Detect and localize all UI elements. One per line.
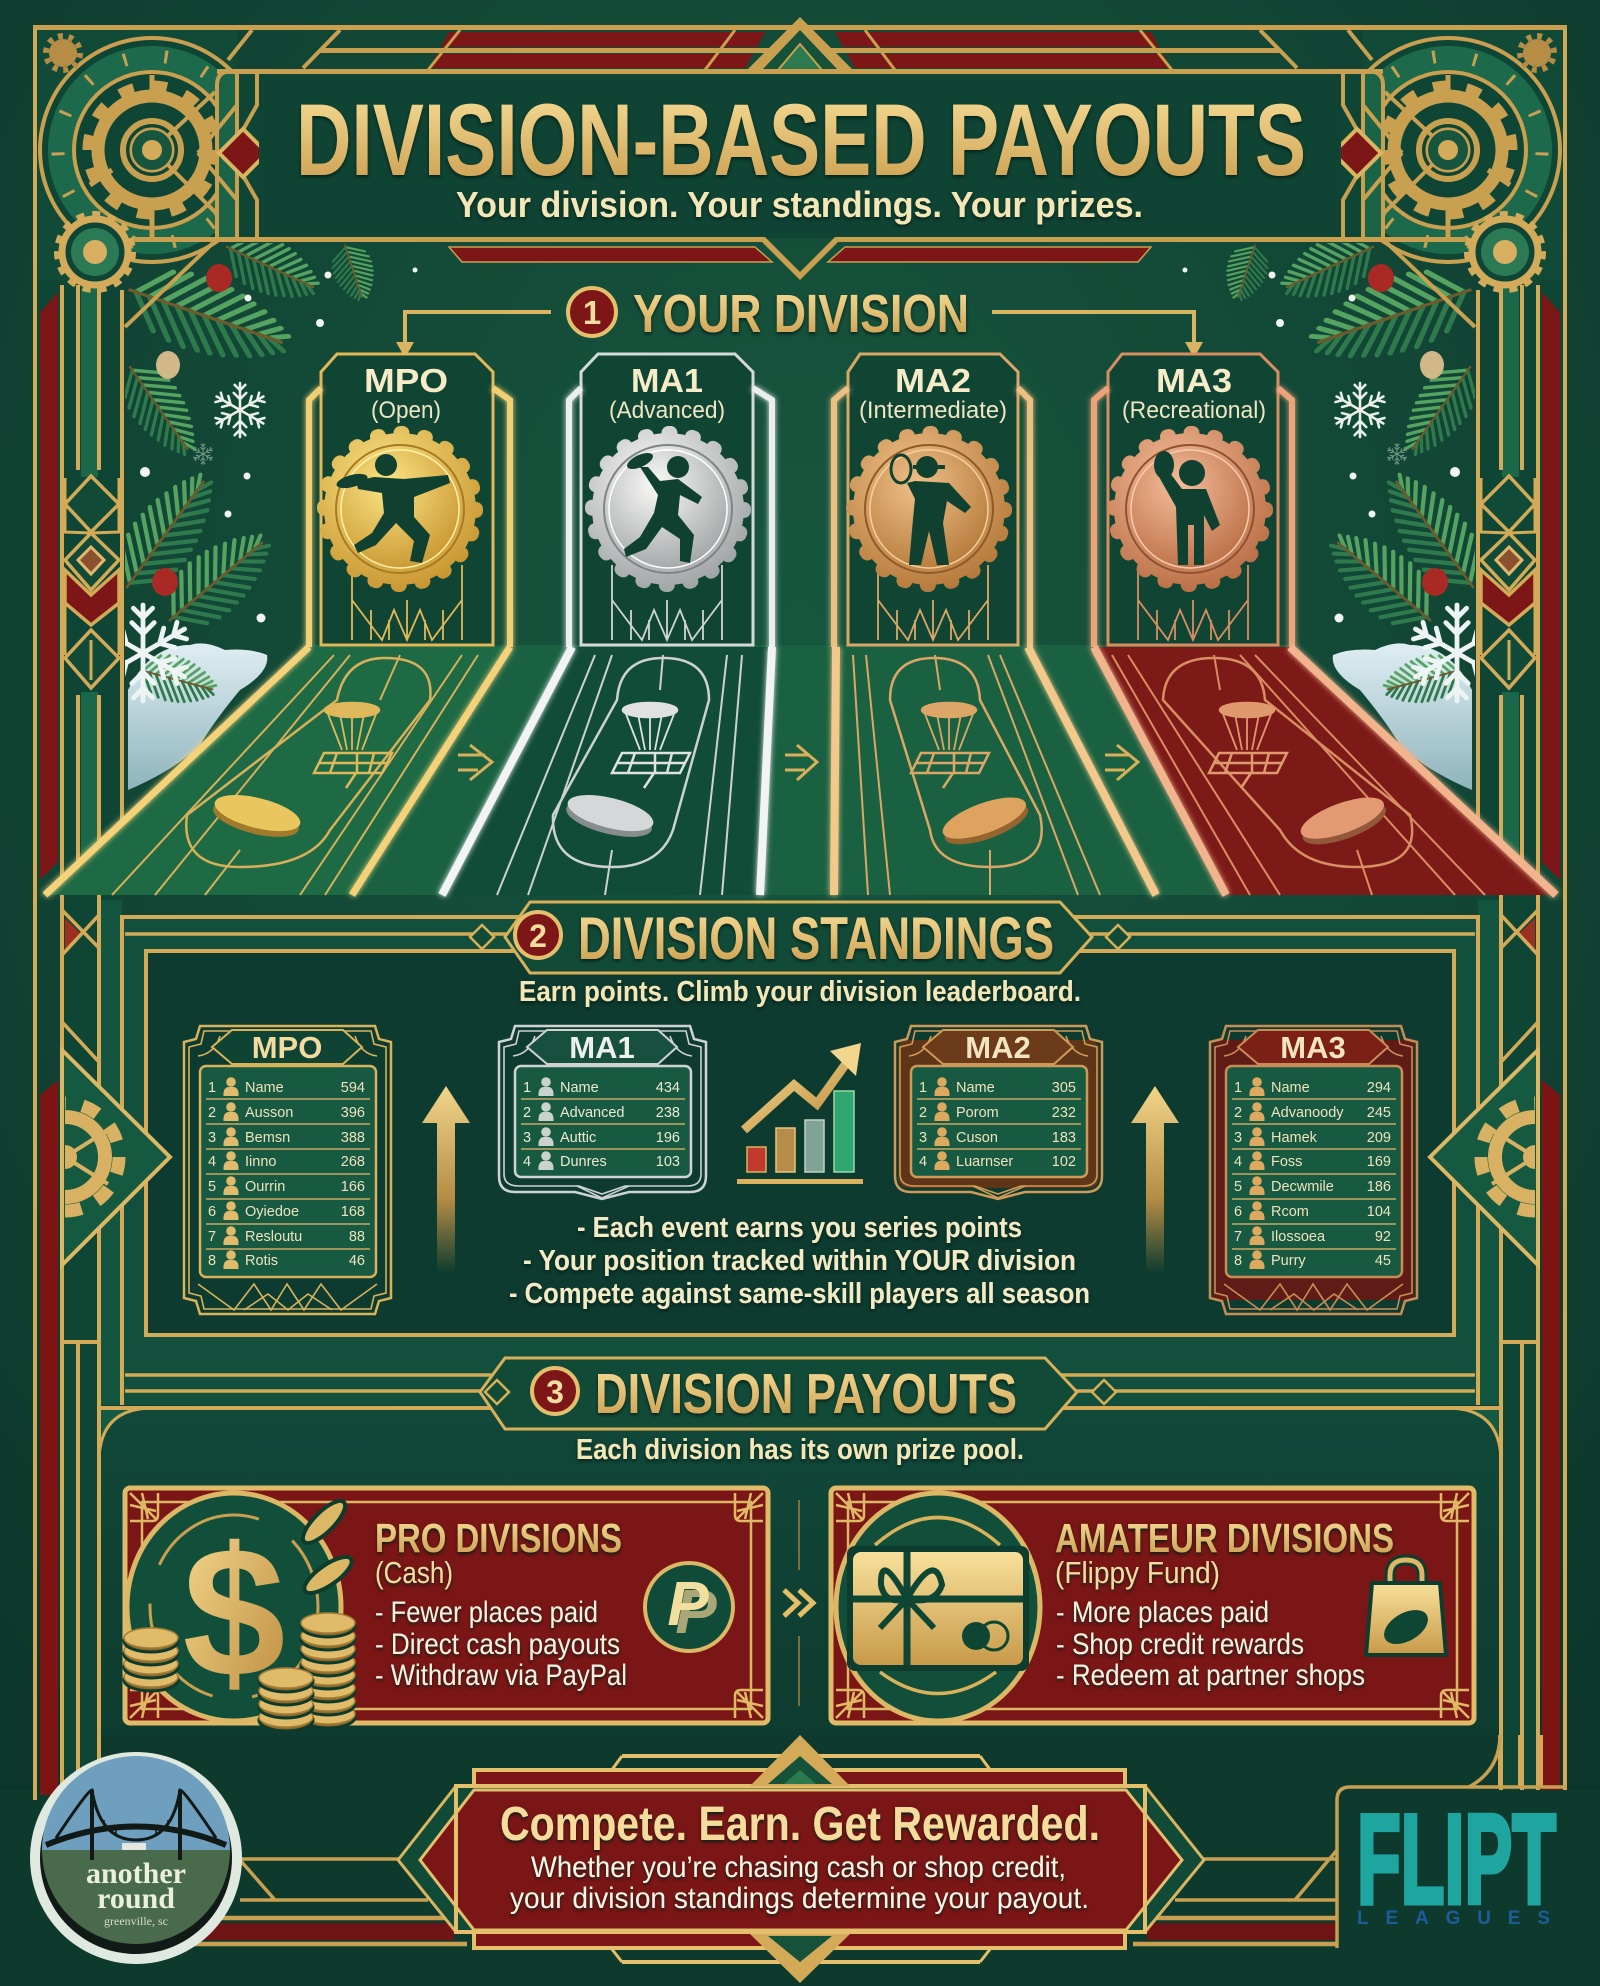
table: MPO leaderboard: 268: [341, 1154, 365, 1170]
table: MA3 leaderboard: 4: [1234, 1154, 1242, 1170]
lane: MPO: [45, 647, 510, 895]
table: MPO leaderboard: [184, 1026, 391, 1314]
table: MA1 leaderboard: 2: [523, 1105, 531, 1121]
badge 1: 1: [583, 294, 601, 331]
bullets: [375, 1596, 627, 1692]
decoration: pine branches and snow: [96, 223, 1504, 790]
heading banner: 3: [546, 1374, 564, 1410]
table: MPO leaderboard: 46: [349, 1253, 365, 1269]
icon: disc: [563, 788, 657, 844]
lane: MA1: [442, 647, 772, 895]
table: MA3 leaderboard: 3: [1234, 1130, 1242, 1146]
bullets: [1056, 1596, 1365, 1692]
icon: right gear chevron: [1430, 1050, 1589, 1265]
bullets: - Shop credit rewards: [1056, 1628, 1304, 1661]
table: MA3 leaderboard: 45: [1375, 1253, 1391, 1269]
division card: MA3: [1094, 354, 1292, 647]
table: MPO leaderboard: Ourrin: [245, 1179, 285, 1195]
heading banner: 2: [529, 918, 547, 954]
card: pro divisions: [124, 1488, 768, 1731]
table: MA3 leaderboard: 245: [1367, 1105, 1391, 1121]
icon: left gear chevron: [11, 1050, 170, 1265]
heading: section 1 your division: [396, 284, 1203, 358]
division card: MPO: [309, 354, 510, 647]
table: MA3 leaderboard: 169: [1367, 1154, 1391, 1170]
icon: dollar medallion: $: [183, 1510, 285, 1716]
bullets: - Direct cash payouts: [375, 1628, 620, 1661]
table: MA3 leaderboard: 8: [1234, 1253, 1242, 1269]
heading banner: DIVISION STANDINGS: [578, 905, 1054, 972]
table: MA2 leaderboard: Cuson: [956, 1130, 998, 1146]
logo: another round: greenville, sc: [104, 1914, 168, 1928]
logo: another round: [30, 1752, 242, 1964]
table: MPO leaderboard: 8: [208, 1253, 216, 1269]
division label: MPO: [364, 362, 448, 399]
subtitle: Each division has its own prize pool.: [576, 1434, 1024, 1466]
table: MA2 leaderboard: 1: [919, 1080, 927, 1096]
logo: FLIPT leagues: LEAGUES: [1357, 1908, 1550, 1929]
table: MA1 leaderboard: Advanced: [560, 1105, 624, 1121]
table: MA3 leaderboard: 5: [1234, 1179, 1242, 1195]
table: MPO leaderboard: 7: [208, 1229, 216, 1245]
icon: basket: [314, 703, 392, 788]
table: MPO leaderboard: Ausson: [245, 1105, 293, 1121]
table: MPO leaderboard: 166: [341, 1179, 365, 1195]
logo: another round: another: [86, 1857, 186, 1890]
bullets: - Redeem at partner shops: [1056, 1659, 1365, 1692]
table: MPO leaderboard: 3: [208, 1130, 216, 1146]
division card: MA1: [569, 354, 772, 647]
chart: rising bars and arrow: [737, 1043, 863, 1184]
icon: shopping bag: [1366, 1560, 1446, 1655]
frame: top art deco band: [33, 17, 1567, 72]
table: MPO leaderboard: Bemsn: [245, 1130, 290, 1146]
table: MA2 leaderboard: 3: [919, 1130, 927, 1146]
table: MPO leaderboard: 594: [341, 1080, 365, 1096]
table: MPO leaderboard: 88: [349, 1229, 365, 1245]
table: MA3 leaderboard: Advanoody: [1271, 1105, 1344, 1121]
heading: PRO DIVISIONS: [375, 1515, 622, 1561]
panel: section 2 standings: [122, 902, 1478, 1405]
table: MA2 leaderboard: 102: [1052, 1154, 1076, 1170]
icon: PayPal: P: [667, 1570, 709, 1639]
table: MA3 leaderboard: [1210, 1026, 1417, 1314]
table: MA3 leaderboard: Decwmile: [1271, 1179, 1334, 1195]
text block: standings bullets: - Your position tracked within YOUR division: [523, 1245, 1076, 1277]
table: MA1 leaderboard: 238: [656, 1105, 680, 1121]
division label: MA3: [1156, 362, 1232, 399]
table: MPO leaderboard: 396: [341, 1105, 365, 1121]
table: MPO leaderboard: MPO: [252, 1030, 322, 1065]
division card: MA1: (Advanced): [609, 397, 725, 424]
icon: disc: [1296, 789, 1391, 853]
table: MA1 leaderboard: 434: [656, 1080, 680, 1096]
message: Whether you’re chasing cash or shop credit,: [531, 1851, 1066, 1884]
text block: standings bullets: - Each event earns you series points: [577, 1212, 1022, 1244]
table: MA3 leaderboard: 186: [1367, 1179, 1391, 1195]
icon: disc: [938, 789, 1033, 853]
icon: basket: [911, 703, 989, 788]
table: MA2 leaderboard: 4: [919, 1154, 927, 1170]
table: MA2 leaderboard: Name: [956, 1080, 995, 1096]
card: amateur divisions: (Flippy Fund): [1055, 1555, 1220, 1590]
table: MA1 leaderboard: 1: [523, 1080, 531, 1096]
table: MA3 leaderboard: Hamek: [1271, 1130, 1318, 1146]
subtitle: Your division. Your standings. Your prizes.: [456, 184, 1143, 225]
bullets: - More places paid: [1056, 1596, 1269, 1629]
heading: section 1 your division: YOUR DIVISION: [633, 284, 969, 344]
table: MA1 leaderboard: 3: [523, 1130, 531, 1146]
table: MA1 leaderboard: 196: [656, 1130, 680, 1146]
title: DIVISION-BASED PAYOUTS: [296, 83, 1306, 197]
lane: MA3: [1094, 647, 1556, 895]
table: MA3 leaderboard: 6: [1234, 1204, 1242, 1220]
division card: MA2: (Intermediate): [859, 397, 1007, 424]
subtitle: Earn points. Climb your division leaderboard.: [519, 976, 1081, 1008]
table: MA2 leaderboard: 183: [1052, 1130, 1076, 1146]
medal: silver: [592, 433, 744, 585]
heading banner: DIVISION PAYOUTS: [595, 1362, 1017, 1426]
table: MPO leaderboard: 5: [208, 1179, 216, 1195]
table: MA2 leaderboard: 232: [1052, 1105, 1076, 1121]
message: your division standings determine your payout.: [510, 1882, 1089, 1915]
division card: MA3: (Recreational): [1122, 397, 1266, 424]
division label: MA1: [631, 362, 703, 399]
panel: closing banner: [398, 1735, 1204, 1983]
heading: AMATEUR DIVISIONS: [1055, 1515, 1394, 1561]
table: MA3 leaderboard: 1: [1234, 1080, 1242, 1096]
arrows between lanes: [458, 745, 1138, 780]
table: MPO leaderboard: Resloutu: [245, 1229, 302, 1245]
table: MA1 leaderboard: 103: [656, 1154, 680, 1170]
table: MA3 leaderboard: 2: [1234, 1105, 1242, 1121]
table: MA3 leaderboard: 209: [1367, 1130, 1391, 1146]
table: MA3 leaderboard: 104: [1367, 1204, 1391, 1220]
table: MPO leaderboard: 1: [208, 1080, 216, 1096]
table: MA3 leaderboard: Rcom: [1271, 1204, 1309, 1220]
table: MA3 leaderboard: Foss: [1271, 1154, 1302, 1170]
division label: MA2: [895, 362, 971, 399]
table: MPO leaderboard: 168: [341, 1204, 365, 1220]
table: MPO leaderboard: Rotis: [245, 1253, 278, 1269]
table: MA2 leaderboard: Luarnser: [956, 1154, 1013, 1170]
icon: dollar medallion: [124, 1493, 357, 1731]
table: MA3 leaderboard: Purry: [1271, 1253, 1306, 1269]
message: [510, 1851, 1089, 1915]
heading: Compete. Earn. Get Rewarded.: [500, 1798, 1100, 1851]
table: MA2 leaderboard: 2: [919, 1105, 927, 1121]
arrow: climb right: [1131, 1086, 1179, 1273]
text block: standings bullets: - Compete against same-skill players all season: [509, 1278, 1090, 1310]
panel: section 3 payouts: [99, 1358, 1501, 1790]
table: MA1 leaderboard: Auttic: [560, 1130, 596, 1146]
arrow: climb left: [422, 1086, 470, 1273]
medal: copper: [1114, 433, 1266, 585]
bullets: - Withdraw via PayPal: [375, 1659, 627, 1692]
table: MA2 leaderboard: MA2: [965, 1030, 1031, 1065]
icon: disc: [210, 788, 304, 844]
table: MA1 leaderboard: Dunres: [560, 1154, 607, 1170]
icon: gift card medallion: [836, 1493, 1040, 1721]
division card: MPO: (Open): [371, 397, 441, 424]
table: MPO leaderboard: 6: [208, 1204, 216, 1220]
bullets: - Fewer places paid: [375, 1596, 598, 1629]
icon: basket: [1209, 703, 1287, 788]
table: MA3 leaderboard: 294: [1367, 1080, 1391, 1096]
card: pro divisions: (Cash): [375, 1555, 453, 1590]
table: MA3 leaderboard: Ilossoea: [1271, 1229, 1326, 1245]
table: MA1 leaderboard: [499, 1026, 706, 1199]
division card: MA2: [834, 354, 1030, 647]
table: MPO leaderboard: Oyiedoe: [245, 1204, 299, 1220]
frame: bottom background and lines: [0, 1735, 1600, 1986]
table: MA2 leaderboard: [895, 1026, 1102, 1199]
table: MA2 leaderboard: Porom: [956, 1105, 999, 1121]
table: MA1 leaderboard: Name: [560, 1080, 599, 1096]
icon: PayPal: [645, 1563, 733, 1651]
logo: another round: round: [97, 1882, 175, 1915]
table: MA1 leaderboard: 4: [523, 1154, 531, 1170]
table: MPO leaderboard: Name: [245, 1080, 284, 1096]
table: MPO leaderboard: 388: [341, 1130, 365, 1146]
text block: standings bullets: [509, 1212, 1090, 1310]
table: MA3 leaderboard: 7: [1234, 1229, 1242, 1245]
table: MA2 leaderboard: 305: [1052, 1080, 1076, 1096]
table: MPO leaderboard: Iinno: [245, 1154, 276, 1170]
lane: MA2: [834, 647, 1156, 895]
table: MPO leaderboard: 2: [208, 1105, 216, 1121]
table: MA1 leaderboard: MA1: [569, 1030, 635, 1065]
icon: chevron between cards: [784, 1500, 813, 1706]
table: MA3 leaderboard: Name: [1271, 1080, 1310, 1096]
medal: gold: [324, 433, 476, 585]
panel: title header: [133, 69, 1467, 280]
table: MA3 leaderboard: 92: [1375, 1229, 1391, 1245]
icon: basket: [612, 703, 690, 788]
lanes floor: [41, 645, 1558, 895]
medal: bronze: [853, 433, 1005, 585]
icon: PayPal: P: [675, 1578, 717, 1647]
badge 1: [568, 288, 616, 336]
card: amateur divisions: [831, 1488, 1474, 1723]
table: MPO leaderboard: 4: [208, 1154, 216, 1170]
table: MA3 leaderboard: MA3: [1280, 1030, 1346, 1065]
